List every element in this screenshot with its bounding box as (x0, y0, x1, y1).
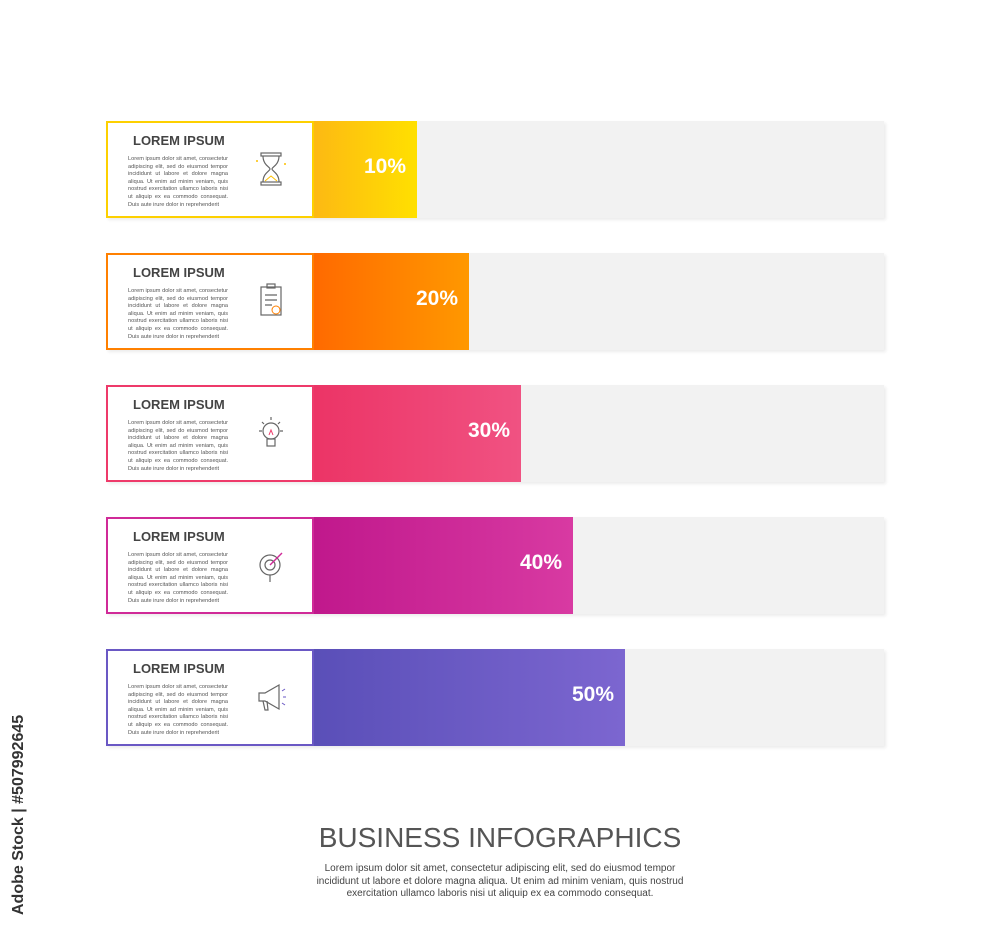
icon: megaphone (258, 684, 286, 711)
text box 3 (106, 385, 314, 482)
text box 2: Lorem ipsum dolor sit amet, consectetur adipiscing elit, sed do eiusmod tempor incididunt ut labore et dolore magna aliqua. Ut enim ad minim veniam, quis nostrud exercitation ullamco laboris nisi ut aliquip ex ea commodo consequat. Duis aute irure dolor in reprehenderit (128, 288, 228, 340)
title: BUSINESS INFOGRAPHICS (319, 822, 681, 853)
row 5: 50% (106, 649, 884, 746)
row 2: 20% (106, 253, 884, 350)
icon: target (259, 552, 282, 582)
subtitle text: Lorem ipsum dolor sit amet, consectetur adipiscing elit, sed do eiusmod tempor incididunt ut labore et dolore magna aliqua. Ut enim ad minim veniam, quis nostrud exercitation ullamco laboris nisi ut aliquip ex ea commodo consequat. (317, 863, 683, 899)
watermark id: Adobe Stock | #507992645 (10, 715, 27, 915)
text box 1: Lorem ipsum dolor sit amet, consectetur adipiscing elit, sed do eiusmod tempor incididunt ut labore et dolore magna aliqua. Ut enim ad minim veniam, quis nostrud exercitation ullamco laboris nisi ut aliquip ex ea commodo consequat. Duis aute irure dolor in reprehenderit (128, 156, 228, 208)
text box 5 (106, 649, 314, 746)
icon: clipboard (260, 283, 282, 316)
text box 4: Lorem ipsum dolor sit amet, consectetur adipiscing elit, sed do eiusmod tempor incididunt ut labore et dolore magna aliqua. Ut enim ad minim veniam, quis nostrud exercitation ullamco laboris nisi ut aliquip ex ea commodo consequat. Duis aute irure dolor in reprehenderit (128, 552, 228, 604)
bar 10% (314, 121, 417, 218)
bar 50% (314, 649, 625, 746)
text box 5: LOREM IPSUM (133, 661, 225, 676)
bar 30%: 30% (468, 419, 510, 442)
bar 50%: 50% (572, 683, 614, 706)
text box 1: LOREM IPSUM (133, 133, 225, 148)
bar 30% (314, 385, 521, 482)
text box 2 (106, 253, 314, 350)
icon: hourglass (256, 152, 286, 186)
row 1: 10% (106, 121, 884, 218)
text box 4 (106, 517, 314, 614)
text box 4: LOREM IPSUM (133, 529, 225, 544)
bar 40% (314, 517, 573, 614)
bar 10%: 10% (364, 155, 406, 178)
text box 2: LOREM IPSUM (133, 265, 225, 280)
row 3: 30% (106, 385, 884, 482)
bar 40%: 40% (520, 551, 562, 574)
bar 20% (314, 253, 469, 350)
bar 20%: 20% (416, 287, 458, 310)
text box 1 (106, 121, 314, 218)
text box 5: Lorem ipsum dolor sit amet, consectetur adipiscing elit, sed do eiusmod tempor incididunt ut labore et dolore magna aliqua. Ut enim ad minim veniam, quis nostrud exercitation ullamco laboris nisi ut aliquip ex ea commodo consequat. Duis aute irure dolor in reprehenderit (128, 684, 228, 736)
row 4: 40% (106, 517, 884, 614)
text box 3: LOREM IPSUM (133, 397, 225, 412)
text box 3: Lorem ipsum dolor sit amet, consectetur adipiscing elit, sed do eiusmod tempor incididunt ut labore et dolore magna aliqua. Ut enim ad minim veniam, quis nostrud exercitation ullamco laboris nisi ut aliquip ex ea commodo consequat. Duis aute irure dolor in reprehenderit (128, 420, 228, 472)
icon: light bulb (259, 417, 283, 447)
